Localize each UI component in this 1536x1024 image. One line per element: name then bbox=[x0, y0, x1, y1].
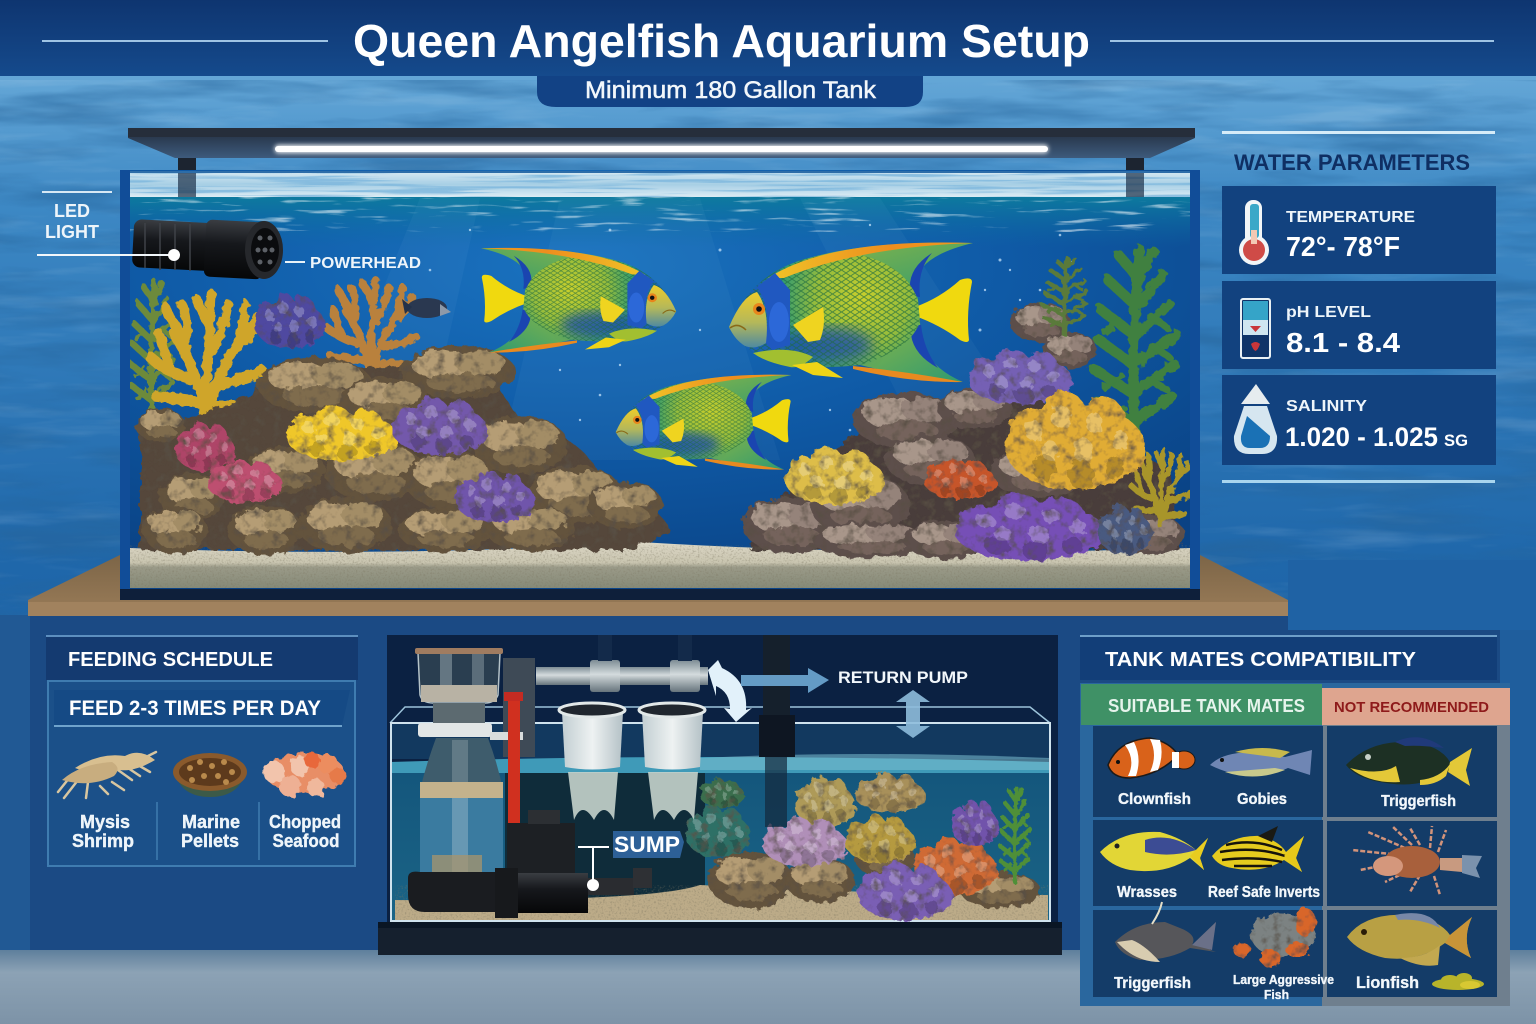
coral, right reef bbox=[785, 349, 1152, 561]
main aquarium tank bbox=[120, 170, 1200, 600]
title banner: Queen Angelfish Aquarium Setup bbox=[353, 15, 1090, 67]
curved flow arrow bbox=[708, 660, 752, 722]
card: pH level: pH LEVEL bbox=[1286, 304, 1371, 321]
sand in sump bbox=[395, 885, 1048, 920]
label: marine pellets: Marine bbox=[182, 812, 240, 832]
fish name labels: Triggerfish bbox=[1381, 793, 1456, 810]
LED light hood bbox=[128, 128, 1195, 198]
coral: gold cluster bbox=[1432, 973, 1484, 990]
subtitle pill bbox=[537, 76, 923, 107]
floor bbox=[0, 950, 1536, 1024]
return pump bbox=[495, 810, 652, 918]
heading: tank mates bbox=[1080, 635, 1497, 680]
angelfish lower center bbox=[616, 375, 791, 470]
fish: clownfish bbox=[1108, 738, 1195, 778]
food: chopped seafood bbox=[263, 752, 346, 797]
label: mysis shrimp bbox=[72, 812, 134, 851]
fish: striped reef fish bbox=[1212, 826, 1304, 872]
rockwork, left reef bbox=[135, 345, 670, 555]
rockwork, right reef bbox=[742, 302, 1185, 560]
label: LED light: LIGHT bbox=[45, 222, 99, 242]
vertical flow arrow bbox=[896, 690, 930, 738]
fish name labels bbox=[1114, 791, 1456, 1002]
banner: feeding frequency bbox=[54, 690, 350, 727]
pipes and fittings bbox=[536, 635, 708, 692]
label: sump bbox=[578, 831, 684, 891]
filter sock left bbox=[559, 703, 625, 820]
food: mysis shrimp bbox=[58, 752, 156, 798]
card: salinity: SALINITY bbox=[1286, 398, 1367, 415]
header: suitable: SUITABLE TANK MATES bbox=[1108, 696, 1305, 716]
fish name labels: Fish bbox=[1264, 987, 1289, 1002]
label: sump: SUMP bbox=[614, 832, 680, 857]
panel: tank mates compatibility bbox=[1080, 635, 1510, 1006]
fish name labels: Lionfish bbox=[1356, 973, 1419, 992]
label: chopped seafood bbox=[269, 812, 341, 851]
small dark fish bbox=[402, 298, 451, 318]
heading: feeding schedule bbox=[46, 635, 358, 680]
subtitle pill: Minimum 180 Gallon Tank bbox=[585, 77, 877, 104]
fish: triggerfish, suitable bbox=[1115, 902, 1216, 962]
fish: parrotfish bbox=[1347, 913, 1472, 966]
heading: feeding schedule: FEEDING SCHEDULE bbox=[68, 649, 273, 671]
label: powerhead: POWERHEAD bbox=[310, 255, 421, 272]
bubbles and particles bbox=[429, 224, 1073, 431]
red tube bbox=[504, 692, 523, 825]
fish: wrasse bbox=[1100, 832, 1208, 871]
card: pH level: 8.1 - 8.4 bbox=[1286, 327, 1400, 358]
card: temperature bbox=[1222, 186, 1496, 274]
creature: large aggressive fish bbox=[1233, 908, 1316, 967]
coral, left reef bbox=[175, 294, 535, 522]
glass frame bbox=[120, 170, 1200, 600]
card: temperature: TEMPERATURE bbox=[1286, 209, 1415, 226]
corals in sump bbox=[686, 772, 1040, 920]
water surface bbox=[128, 172, 1190, 247]
card: salinity: 1.020 - 1.025 bbox=[1285, 422, 1438, 452]
sump glass tank bbox=[390, 707, 1050, 922]
fish name labels: Gobies bbox=[1237, 791, 1287, 808]
banner: feeding frequency: FEED 2-3 TIMES PER DAY bbox=[69, 697, 321, 720]
card: temperature: 72°- 78°F bbox=[1286, 231, 1400, 262]
fish name labels: Reef Safe Inverts bbox=[1208, 884, 1320, 901]
drain pipe bbox=[759, 635, 795, 827]
sand substrate bbox=[130, 542, 1190, 588]
food: marine pellets bbox=[173, 753, 247, 797]
header: not recommended: NOT RECOMMENDED bbox=[1334, 699, 1489, 716]
protein skimmer bbox=[408, 648, 535, 912]
plant in sump bbox=[1000, 788, 1030, 882]
angelfish upper left bbox=[481, 248, 676, 353]
label: chopped seafood: Chopped bbox=[269, 812, 341, 832]
label: chopped seafood: Seafood bbox=[272, 831, 340, 851]
label: LED light bbox=[37, 192, 180, 261]
title banner bbox=[0, 0, 1536, 76]
card: salinity: SG bbox=[1444, 431, 1468, 450]
plants, right reef bbox=[1043, 250, 1190, 525]
wooden stand bbox=[28, 555, 1288, 616]
card: salinity bbox=[1222, 375, 1496, 465]
label: mysis shrimp: Shrimp bbox=[72, 831, 134, 851]
fish: gobies bbox=[1210, 748, 1312, 777]
angelfish upper right bbox=[729, 242, 973, 382]
panel: feeding schedule bbox=[46, 635, 358, 866]
fish name labels: Large Aggressive bbox=[1233, 972, 1334, 987]
label: marine pellets: Pellets bbox=[181, 831, 239, 851]
plants and branching coral, left bbox=[130, 280, 416, 425]
label: marine pellets bbox=[181, 812, 240, 851]
fish name labels: Clownfish bbox=[1118, 791, 1191, 808]
card: pH level bbox=[1222, 281, 1496, 369]
fish: lionfish bbox=[1352, 826, 1482, 895]
header: not recommended bbox=[1322, 688, 1510, 725]
powerhead pump bbox=[132, 219, 283, 279]
filter sock right bbox=[639, 703, 705, 820]
header: suitable bbox=[1081, 684, 1322, 725]
label: return pump: RETURN PUMP bbox=[838, 668, 968, 687]
fish name labels: Wrasses bbox=[1117, 884, 1177, 901]
panel: sump system bbox=[378, 635, 1062, 955]
panel: water parameters bbox=[1222, 131, 1496, 483]
label: mysis shrimp: Mysis bbox=[80, 812, 130, 832]
light rays bbox=[330, 198, 1010, 460]
heading: water parameters: WATER PARAMETERS bbox=[1234, 150, 1470, 175]
row cells bbox=[1093, 726, 1497, 997]
label: LED light: LED bbox=[54, 201, 90, 221]
cabinet base bbox=[378, 922, 1062, 955]
fish name labels: Triggerfish bbox=[1114, 975, 1191, 992]
heading: tank mates: TANK MATES COMPATIBILITY bbox=[1105, 649, 1417, 671]
horizontal flow arrow bbox=[741, 668, 829, 693]
fish: triggerfish, not recommended bbox=[1346, 737, 1472, 786]
